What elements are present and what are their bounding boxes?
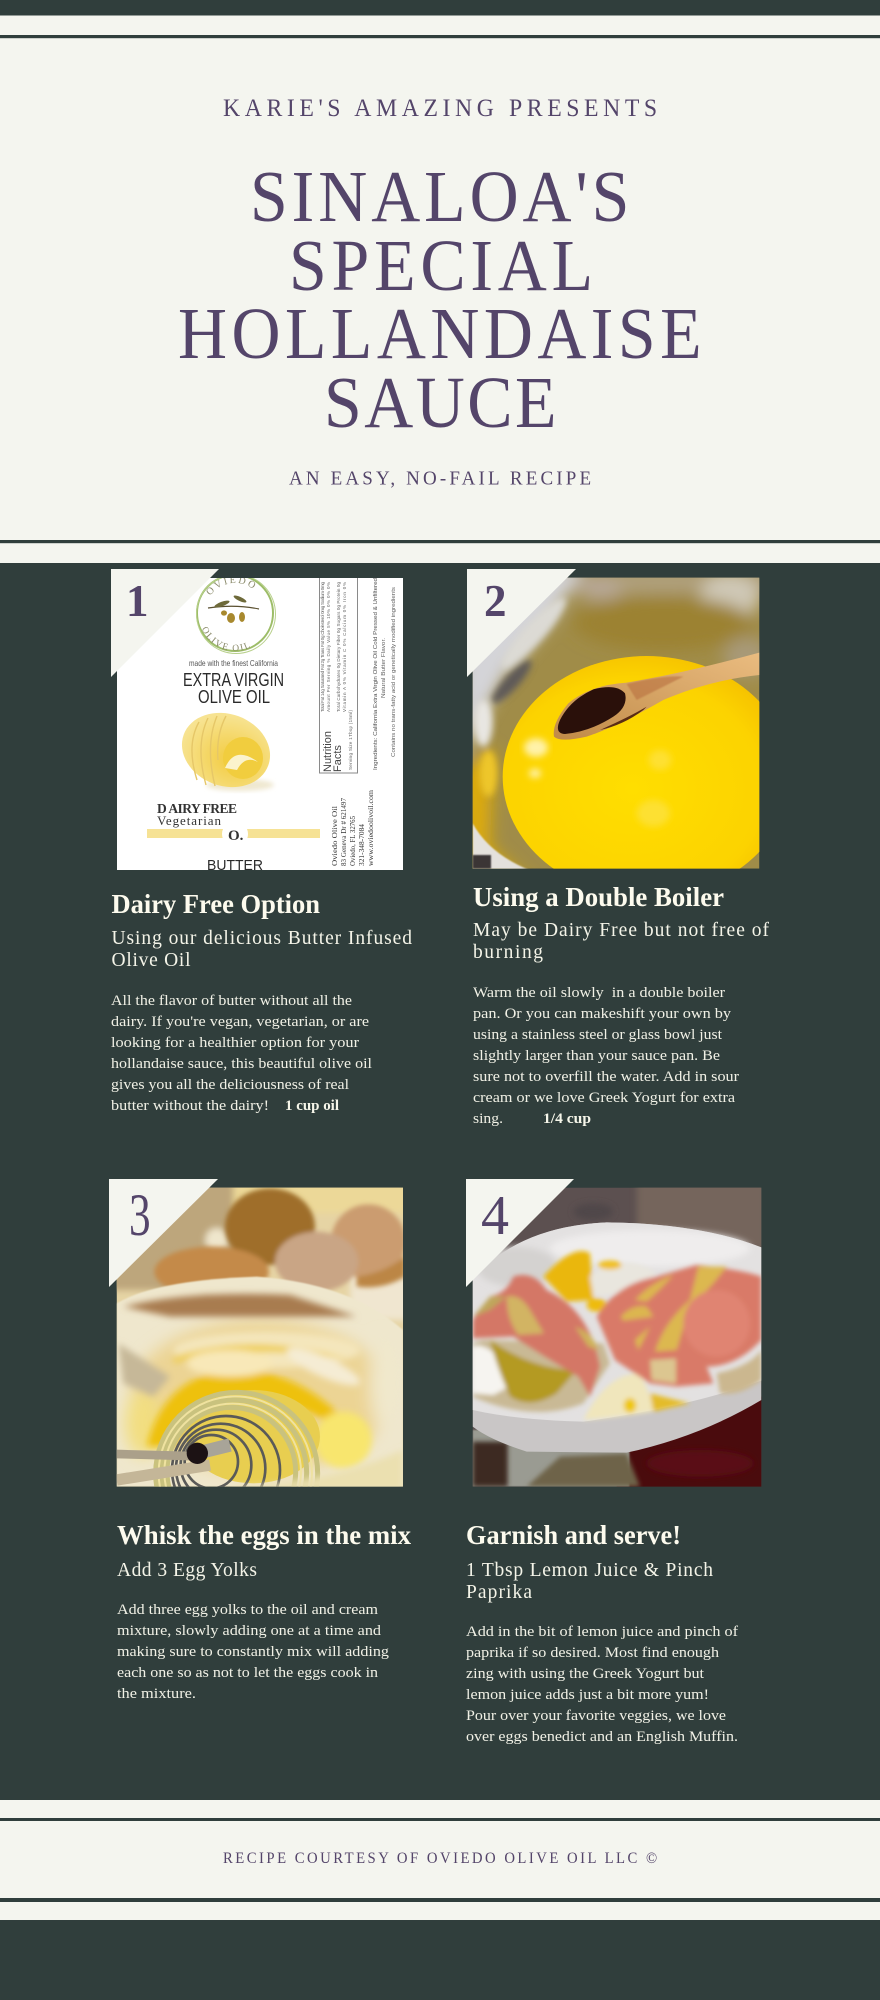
photo: olive oil label <box>117 578 403 870</box>
body 4: over eggs benedict and an English Muffin. <box>466 1729 738 1745</box>
body 1: dairy. If you're vegan, vegetarian, or are <box>111 1014 369 1030</box>
body 2: sure not to overfill the water. Add in sour <box>473 1069 739 1085</box>
number corner 2 <box>467 569 576 677</box>
number corner 3: 3 <box>129 1182 151 1249</box>
rotated address: www.oviedoolivoil.com <box>366 790 375 866</box>
body 2: cream or we love Greek Yogurt for extra <box>473 1090 735 1106</box>
panel: header <box>0 16 880 563</box>
tablecloth <box>473 1397 763 1490</box>
subheading 2 <box>473 920 770 963</box>
body 1: looking for a healthier option for your <box>111 1035 359 1051</box>
rotated address: 321-348-7084 <box>357 824 366 866</box>
body 1 <box>111 993 372 1114</box>
bowl interior <box>125 1320 397 1473</box>
title: SPECIAL <box>289 226 593 307</box>
panel: step 2 <box>460 567 791 1127</box>
rotated address: Oviedo, FL 32765 <box>348 816 357 866</box>
rotated ingredients: Contains no trans-fatty acid or genetically modified ingredients <box>391 587 397 757</box>
body 4 <box>466 1624 738 1745</box>
label text: EXTRA VIRGIN <box>183 670 284 690</box>
panel: step 1 <box>111 569 412 1114</box>
body 4: zing with using the Greek Yogurt but <box>466 1666 705 1682</box>
band with O. badge <box>147 829 320 840</box>
food <box>473 1251 761 1420</box>
subheading 4: 1 Tbsp Lemon Juice & Pinch <box>466 1560 713 1581</box>
body 4: Add in the bit of lemon juice and pinch of <box>466 1624 738 1640</box>
body 2: slightly larger than your sauce pan. Be <box>473 1048 720 1064</box>
body 2 <box>473 985 739 1127</box>
panel: step 4 <box>466 1179 767 1745</box>
subheading 1 <box>112 928 412 971</box>
icon: butter curl <box>182 712 274 793</box>
panel: step 3 <box>109 1179 411 1702</box>
rotated ingredients: Natural Butter Flavor. <box>381 638 387 698</box>
number corner 3 <box>109 1179 218 1287</box>
subheading 4: Paprika <box>466 1582 532 1603</box>
heading 4: Garnish and serve! <box>466 1520 681 1550</box>
icon: wooden spoon <box>554 653 759 740</box>
subheading 2: May be Dairy Free but not free of <box>473 920 770 941</box>
body 1: gives you all the deliciousness of real <box>111 1077 349 1093</box>
nutrition box: Total Fat 14g Saturated Fat 2g Trans Fat 0g Cholesterol 0mg Sodium 0mg <box>320 582 325 712</box>
nutrition box: Amount Per Serving % Daily Value 5% 10% 0% 0% 0% <box>326 582 331 712</box>
number corner 1: 1 <box>126 576 148 626</box>
subheading 1: Using our delicious Butter Infused <box>112 928 412 949</box>
title <box>178 157 702 444</box>
rotated ingredients: Ingredients: California Extra Virgin Olive Oil Cold Pressed & Unfiltered <box>373 578 379 770</box>
body 1: All the flavor of butter without all the <box>111 993 352 1009</box>
footer credit: RECIPE COURTESY OF OVIEDO OLIVE OIL LLC © <box>223 1851 657 1867</box>
label text: made with the finest California <box>189 658 278 668</box>
heading 1: Dairy Free Option <box>112 889 320 919</box>
rotated address <box>330 790 375 866</box>
nutrition box: Nutrition <box>322 731 334 772</box>
photo: eggs benedict <box>473 1180 767 1490</box>
body 1: butter without the dairy! <box>111 1098 269 1114</box>
subheading 4 <box>466 1560 713 1603</box>
nutrition box: Serving Size 1Tbsp (15ml) <box>348 710 353 770</box>
band with O. badge: O. <box>228 828 244 844</box>
number corner 1 <box>111 569 219 677</box>
title: HOLLANDAISE <box>178 294 702 375</box>
number corner 4 <box>466 1179 574 1287</box>
icon: whisk <box>116 1390 320 1487</box>
number corner 4: 4 <box>481 1185 509 1247</box>
nutrition box: Total Carbohydrates 0g Dietary Fiber 0g Sugars 0g Protein 0g <box>336 582 341 712</box>
label text: OLIVE OIL <box>198 687 270 707</box>
body 1: 1 cup oil <box>285 1098 339 1114</box>
title: SINALOA'S <box>250 157 629 238</box>
body 3 <box>117 1602 390 1702</box>
text: dairy free <box>157 804 236 828</box>
label text <box>184 660 283 703</box>
photo: melted oil in pot <box>472 578 760 869</box>
title: SAUCE <box>324 363 557 444</box>
body 2: 1/4 cup <box>543 1111 591 1127</box>
subheading 3: Add 3 Egg Yolks <box>117 1560 257 1581</box>
text: dairy free: D AIRY FREE <box>157 801 237 816</box>
text: butter: BUTTER <box>207 857 263 874</box>
subheading 2: burning <box>473 942 543 963</box>
nutrition box <box>320 570 358 773</box>
body 3: Add three egg yolks to the oil and cream <box>117 1602 378 1618</box>
rotated address: 83 Geneva Dr # 621497 <box>339 798 348 866</box>
number corner 2: 2 <box>484 576 506 626</box>
heading 3: Whisk the eggs in the mix <box>117 1520 411 1550</box>
body 4: lemon juice adds just a bit more yum! <box>466 1687 709 1703</box>
nutrition box: Facts <box>332 745 344 772</box>
body 2: sing. <box>473 1111 503 1127</box>
subtitle: AN EASY, NO-FAIL RECIPE <box>289 468 591 490</box>
body 2: pan. Or you can makeshift your own by <box>473 1006 732 1022</box>
panel: footer <box>0 1800 880 1920</box>
body 2: using a stainless steel or glass bowl just <box>473 1027 723 1043</box>
body 4: Pour over your favorite veggies, we love <box>466 1708 726 1724</box>
body 3: making sure to constantly mix will adding <box>117 1644 390 1660</box>
rotated ingredients <box>373 578 397 770</box>
nutrition box: Vitamin A 0% Vitamin C 0% Calcium 0% Iron 0% <box>342 582 347 712</box>
body 4: paprika if so desired. Most find enough <box>466 1645 720 1661</box>
body 3: the mixture. <box>117 1686 196 1702</box>
rotated address: Oviedo Olive Oil <box>330 806 339 866</box>
icon: Oviedo logo: OLIVE OIL <box>202 627 250 652</box>
body 3: each one so as not to let the eggs cook in <box>117 1665 379 1681</box>
body 1: hollandaise sauce, this beautiful olive oil <box>111 1056 372 1072</box>
text: dairy free: Vegetarian <box>157 813 222 828</box>
heading 2: Using a Double Boiler <box>473 882 724 912</box>
icon: Oviedo logo <box>196 578 276 654</box>
plate <box>473 1222 761 1453</box>
icon: Oviedo logo: OVIEDO <box>206 578 256 594</box>
body 2: Warm the oil slowly in a double boiler <box>473 985 725 1001</box>
body 3: mixture, slowly adding one at a time and <box>117 1623 382 1639</box>
eyebrow: KARIE'S AMAZING PRESENTS <box>223 94 657 122</box>
photo: whisking eggs <box>116 1188 403 1487</box>
subheading 1: Olive Oil <box>112 950 191 971</box>
